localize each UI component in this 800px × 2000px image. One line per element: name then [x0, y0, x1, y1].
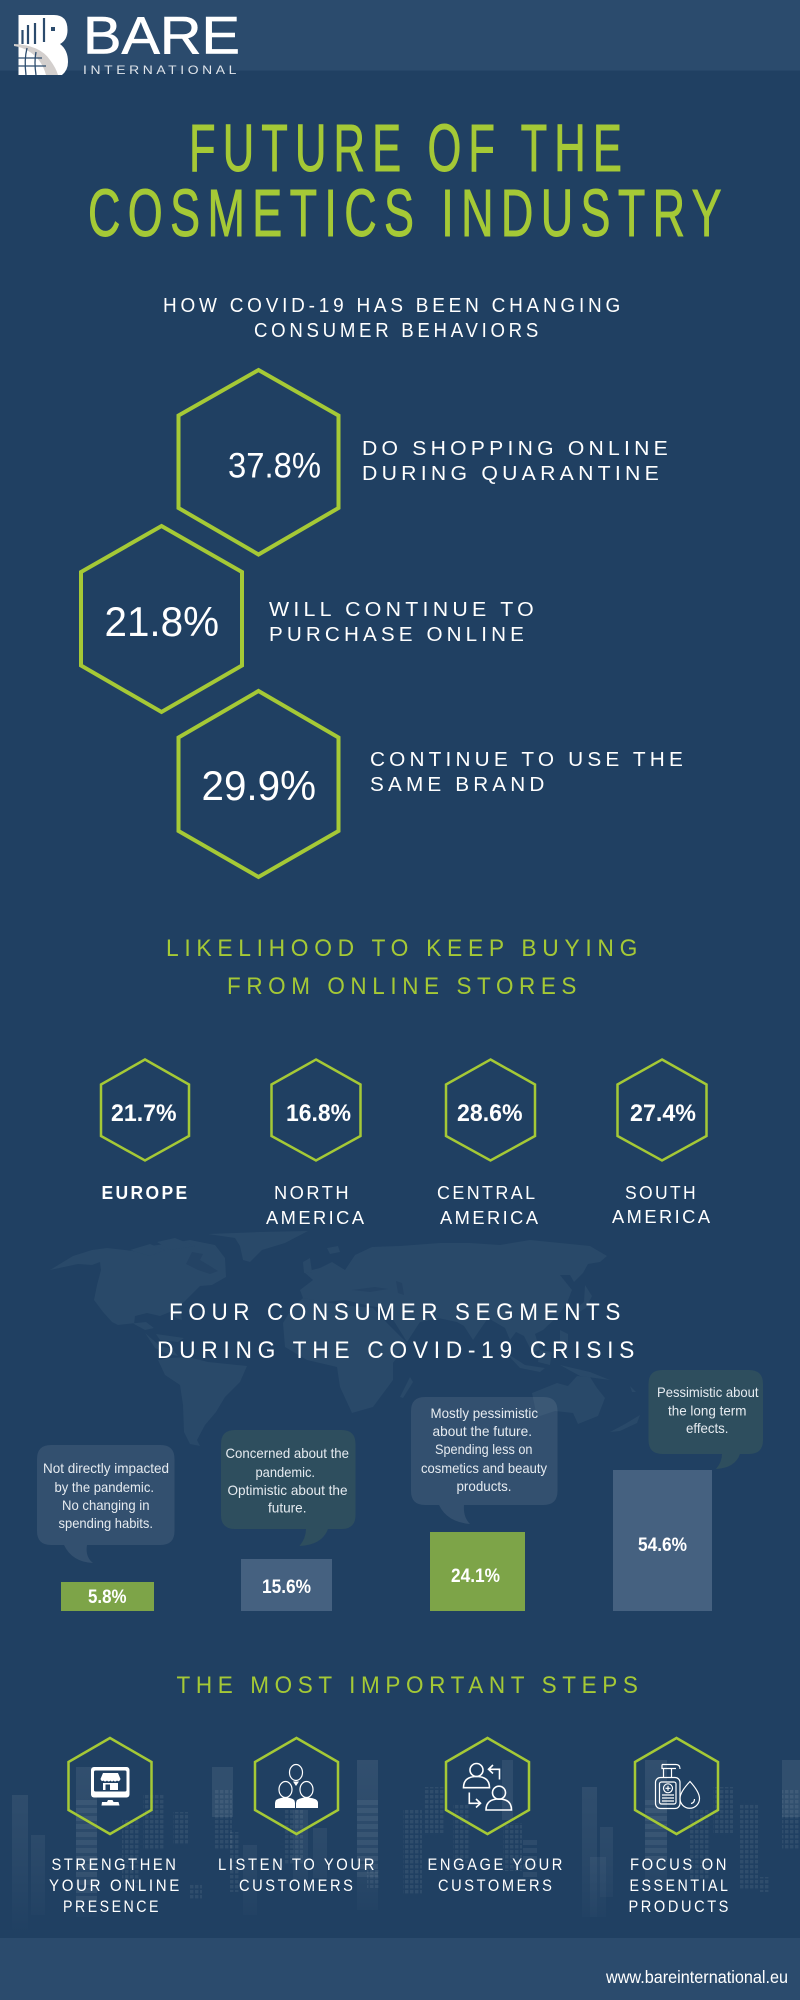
stat: 37.8% shopping online: DO SHOPPING ONLINE	[362, 438, 672, 460]
heading: likelihood: FROM ONLINE STORES	[227, 973, 582, 1000]
step: focus on essential products: ESSENTIAL	[630, 1876, 730, 1895]
step: focus on essential products: PRODUCTS	[628, 1897, 731, 1916]
icon: three people	[275, 1764, 318, 1808]
segment 3: speech bubble	[411, 1397, 558, 1524]
logo: BARE International	[14, 6, 240, 77]
segment 2: bar: 15.6%	[262, 1577, 311, 1598]
region: South America	[612, 1060, 712, 1227]
stat: 21.8% continue online: 21.8%	[104, 598, 219, 645]
segment 4: speech bubble	[648, 1370, 763, 1469]
step: engage customers	[428, 1738, 565, 1895]
stat: 37.8% shopping online	[178, 370, 672, 554]
segment 3: speech bubble: products.	[456, 1478, 512, 1494]
segment 2: speech bubble	[221, 1430, 356, 1546]
region: Europe	[101, 1060, 190, 1203]
skyline background	[12, 1760, 800, 1935]
region: Central America: AMERICA	[440, 1207, 540, 1228]
region: South America: 27.4%	[630, 1100, 696, 1127]
segment 3: bar	[430, 1532, 525, 1611]
icon: monitor with store	[91, 1767, 130, 1806]
segment 4: speech bubble: Pessimistic about	[657, 1384, 759, 1400]
segment 3: speech bubble: cosmetics and beauty	[421, 1460, 547, 1476]
step: strengthen online presence: STRENGTHEN	[52, 1855, 178, 1874]
region: South America: SOUTH	[625, 1182, 698, 1203]
footer band	[0, 1938, 800, 2000]
subtitle: CONSUMER BEHAVIORS	[254, 320, 542, 342]
segment 3: bar: 24.1%	[451, 1566, 500, 1587]
stat: 37.8% shopping online: DURING QUARANTINE	[362, 463, 663, 485]
stat: 21.8% continue online	[81, 526, 538, 712]
step: listen to customers	[218, 1738, 377, 1895]
region: North America: NORTH	[274, 1182, 351, 1203]
stat: 29.9% same brand	[178, 691, 687, 877]
region: North America: 16.8%	[286, 1100, 351, 1127]
heading: four consumer segments: DURING THE COVID-19 CRISIS	[157, 1337, 640, 1364]
segment 2: speech bubble: Concerned about the	[226, 1445, 349, 1461]
step: strengthen online presence	[49, 1738, 182, 1916]
segment 2: speech bubble: future.	[268, 1500, 306, 1516]
stat: 29.9% same brand: SAME BRAND	[370, 774, 548, 796]
region: North America	[266, 1060, 366, 1228]
segment 1: speech bubble: Not directly impacted	[43, 1460, 169, 1476]
icon: lotion bottle and drop	[656, 1764, 700, 1808]
region: Europe: 21.7%	[111, 1100, 176, 1127]
heading: likelihood: LIKELIHOOD TO KEEP BUYING	[166, 935, 643, 962]
step: focus on essential products: FOCUS ON	[630, 1855, 729, 1874]
step: strengthen online presence: YOUR ONLINE	[49, 1876, 182, 1895]
region: Central America	[437, 1060, 540, 1228]
segment 3: speech bubble: about the future.	[432, 1423, 532, 1439]
subtitle	[163, 295, 624, 342]
title	[88, 111, 729, 251]
segment 1: speech bubble: spending habits.	[58, 1515, 153, 1531]
segment 1: speech bubble	[37, 1445, 174, 1563]
segment 4: bar	[613, 1470, 712, 1611]
world map background	[50, 1231, 640, 1446]
segment 1: speech bubble: No changing in	[62, 1497, 150, 1513]
segment 1: bar	[61, 1582, 154, 1611]
subtitle: HOW COVID-19 HAS BEEN CHANGING	[163, 295, 624, 317]
segment 3: speech bubble: Mostly pessimistic	[430, 1405, 538, 1421]
segment 2: speech bubble: Optimistic about the	[228, 1482, 348, 1498]
step: listen to customers: LISTEN TO YOUR	[218, 1855, 377, 1874]
segment 1: speech bubble: by the pandemic.	[54, 1479, 154, 1495]
stat: 21.8% continue online: PURCHASE ONLINE	[269, 624, 528, 646]
logo wordmark: BARE	[83, 6, 240, 66]
step: strengthen online presence: PRESENCE	[63, 1897, 161, 1916]
heading: most important steps: THE MOST IMPORTANT STEPS	[176, 1672, 644, 1699]
website url: www.bareinternational.eu	[605, 1967, 788, 1987]
step: engage customers: ENGAGE YOUR	[428, 1855, 565, 1874]
top header band	[0, 0, 800, 70]
stat: 29.9% same brand: CONTINUE TO USE THE	[370, 749, 687, 771]
heading: four consumer segments	[157, 1299, 640, 1364]
region: Central America: 28.6%	[457, 1100, 522, 1127]
segment 4: bar: 54.6%	[638, 1535, 687, 1556]
heading: four consumer segments: FOUR CONSUMER SEGMENTS	[169, 1299, 626, 1326]
segment 2: speech bubble: pandemic.	[256, 1464, 315, 1480]
step: engage customers: CUSTOMERS	[438, 1876, 554, 1895]
segment 3: speech bubble: Spending less on	[435, 1441, 532, 1457]
segment 1: bar: 5.8%	[88, 1587, 127, 1608]
heading: likelihood	[166, 935, 643, 1000]
step: focus on essential products	[628, 1738, 731, 1916]
logo subtitle: INTERNATIONAL	[83, 65, 240, 77]
icon: exchange between people	[464, 1764, 512, 1810]
segment 4: speech bubble: the long term	[668, 1402, 746, 1418]
logo mark	[14, 15, 68, 75]
segment 2: bar	[241, 1559, 332, 1611]
region: South America: AMERICA	[612, 1206, 712, 1227]
stat: 37.8% shopping online: 37.8%	[228, 446, 321, 486]
region: North America: AMERICA	[266, 1207, 366, 1228]
region: Europe: EUROPE	[102, 1182, 190, 1203]
stat: 21.8% continue online: WILL CONTINUE TO	[269, 599, 538, 621]
region: Central America: CENTRAL	[437, 1182, 538, 1203]
step: listen to customers: CUSTOMERS	[239, 1876, 356, 1895]
stat: 29.9% same brand: 29.9%	[202, 762, 316, 809]
segment 4: speech bubble: effects.	[686, 1420, 728, 1436]
